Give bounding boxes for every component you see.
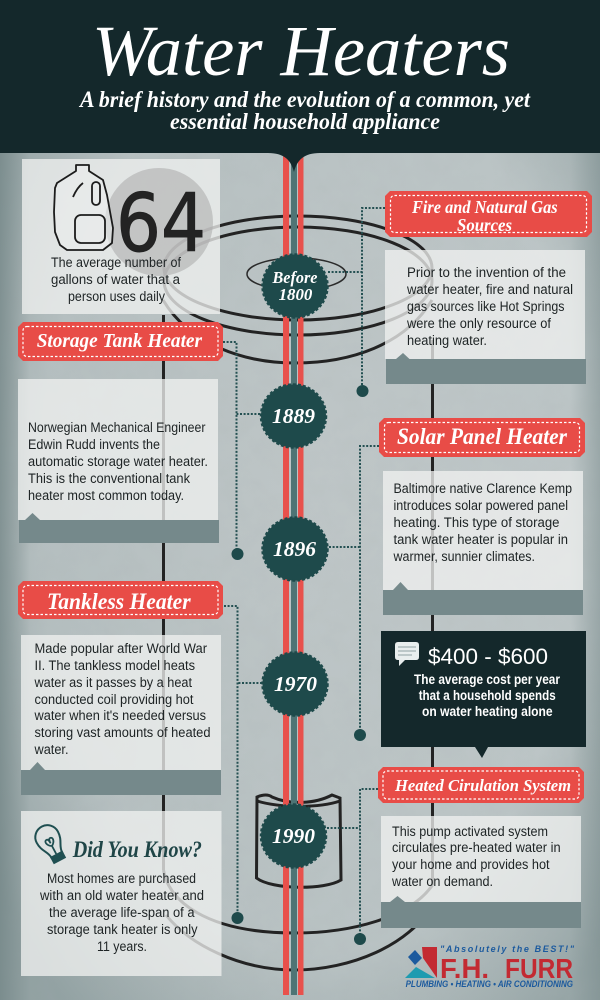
caption: The average number of — [51, 255, 181, 270]
body text: with an old water heater and — [39, 888, 204, 903]
cup sketch at 1990 — [256, 795, 341, 887]
body text: heating. This type of storage — [394, 515, 560, 530]
body text — [28, 420, 208, 503]
body text — [393, 481, 572, 564]
body text: circulates pre-heated water in — [392, 840, 561, 855]
body text — [39, 871, 204, 954]
panel: 64 gallons — [22, 159, 220, 314]
banner: tankless heater: Tankless Heater — [47, 589, 192, 614]
caption: gallons of water that a — [51, 272, 180, 287]
connector: heated circulation — [327, 789, 378, 945]
timeline badge: 1896 — [262, 518, 328, 580]
timeline badge: 1990: 1990 — [272, 824, 316, 848]
body text: your home and provides hot — [392, 857, 550, 872]
footer bar — [381, 896, 581, 928]
number 64: 64 — [116, 177, 206, 270]
connector: fire and natural gas — [328, 208, 385, 397]
body text: warmer, sunnier climates. — [393, 549, 535, 564]
cost caption — [414, 672, 561, 719]
logo tagline: "Absolutely the BEST!" — [440, 944, 575, 954]
caption: person uses daily — [68, 289, 165, 304]
logo name: F.H. — [440, 953, 489, 984]
banner: fire and natural gas — [385, 191, 592, 237]
body text: storage tank heater is only — [47, 922, 198, 937]
body text: Most homes are purchased — [47, 871, 196, 886]
header band — [0, 0, 600, 172]
footer bar — [21, 762, 221, 795]
timeline badge: 1896: 1896 — [273, 537, 317, 561]
body text: tank water heater is popular in — [394, 532, 568, 547]
small burner ellipse — [247, 258, 346, 290]
timeline badge: 1970: 1970 — [274, 672, 318, 696]
timeline badge: 1990 — [261, 804, 326, 868]
timeline badge: 1889: 1889 — [272, 404, 316, 428]
cost caption: on water heating alone — [422, 704, 553, 719]
body text: were the only resource of — [406, 316, 551, 331]
logo: F.H. Furr — [405, 944, 575, 989]
banner: solar panel heater — [379, 418, 585, 457]
banner: heated circulation system — [378, 767, 584, 803]
footer bar — [383, 582, 583, 615]
body text — [391, 824, 561, 889]
body text: 11 years. — [97, 939, 147, 954]
cost caption: The average cost per year — [414, 672, 561, 687]
footer bar — [19, 513, 219, 543]
icon: light bulb — [31, 821, 70, 866]
panel: tankless heater — [21, 635, 221, 795]
footer bar — [386, 353, 586, 384]
body text: II. The tankless model heats — [34, 658, 195, 673]
connector: tankless — [224, 606, 262, 924]
body text: water. — [34, 742, 68, 757]
banner: fire and natural gas: Fire and Natural Gas — [411, 197, 558, 217]
cost range: $400 - $600 — [428, 644, 548, 669]
body text: water heater, fire and natural — [406, 282, 573, 297]
banner: tankless heater — [18, 581, 223, 619]
body text — [406, 265, 573, 348]
body text: Norwegian Mechanical Engineer — [28, 420, 206, 435]
panel: did you know — [21, 811, 222, 976]
body text: water when it's needed versus — [34, 708, 206, 723]
gray circle — [105, 168, 213, 276]
logo icon — [405, 947, 437, 978]
logo services: PLUMBING • HEATING • AIR CONDITIONING — [406, 979, 573, 989]
panel: solar panel heater — [383, 471, 583, 615]
banner: storage tank heater: Storage Tank Heater — [37, 330, 202, 352]
caption — [51, 255, 181, 304]
body text: water on demand. — [391, 874, 493, 889]
timeline pipes — [283, 153, 304, 995]
body text: introduces solar powered panel — [394, 498, 568, 513]
body text: Made popular after World War — [34, 641, 207, 656]
connector: storage tank — [223, 342, 260, 560]
panel: heated circulation system — [381, 816, 581, 928]
timeline badge: before 1800: 1800 — [279, 285, 313, 304]
connector: solar panel — [329, 446, 379, 741]
banner: solar panel heater: Solar Panel Heater — [397, 424, 568, 449]
body text: heater most common today. — [28, 488, 184, 503]
body text: the average life-span of a — [49, 905, 195, 920]
subtitle: essential household appliance — [170, 109, 440, 134]
body text: water as it passes by a heat — [34, 675, 192, 690]
panel: storage tank heater — [18, 379, 219, 543]
body text: Prior to the invention of the — [407, 265, 566, 280]
timeline badge: 1970 — [262, 652, 328, 716]
icon: milk jug — [54, 165, 113, 250]
body text: Edwin Rudd invents the — [28, 437, 160, 452]
body text: heating water. — [407, 333, 487, 348]
body text: automatic storage water heater. — [28, 454, 208, 469]
timeline badge: before 1800 — [262, 254, 328, 318]
banner: storage tank heater — [18, 322, 223, 361]
cost caption: that a household spends — [419, 688, 556, 703]
logo name: FURR — [505, 953, 573, 984]
heading: Did You Know? — [72, 837, 202, 862]
logo name — [440, 953, 573, 984]
water heater tank sketch — [163, 216, 432, 970]
body text — [34, 641, 210, 757]
timeline badge: before 1800: Before — [272, 268, 318, 287]
body text: Baltimore native Clarence Kemp — [394, 481, 572, 496]
banner: fire and natural gas: Sources — [457, 215, 512, 235]
body text: This pump activated system — [392, 824, 548, 839]
body text: conducted coil providing hot — [34, 692, 194, 707]
icon: speech bubbles — [395, 642, 419, 666]
body text: gas sources like Hot Springs — [407, 299, 565, 314]
panel: fire and natural gas — [385, 250, 586, 384]
subtitle: A brief history and the evolution of a common, yet — [78, 87, 531, 112]
body text: storing vast amounts of heated — [34, 725, 210, 740]
callout: average cost — [381, 631, 586, 758]
banner: heated circulation system: Heated Cirulation System — [394, 776, 571, 795]
title: Water Heaters — [92, 11, 510, 91]
subtitle — [78, 87, 531, 134]
body text: This is the conventional tank — [28, 471, 190, 486]
timeline badge: 1889 — [261, 384, 326, 448]
